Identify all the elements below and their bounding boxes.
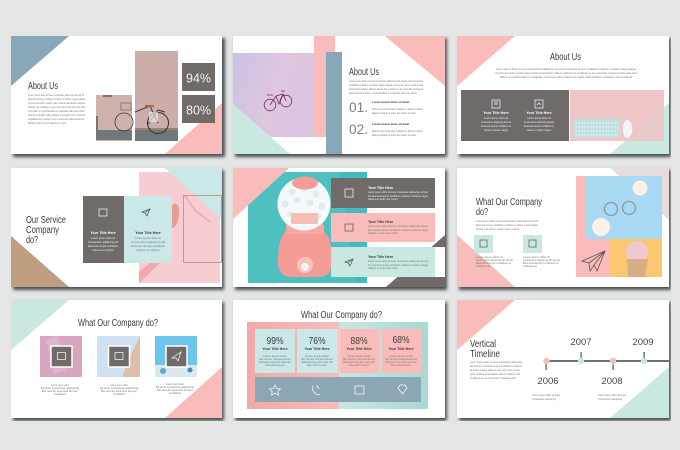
intro text: Duis aute irure dolor in reprehenderit in voluptate velit esse cillum <box>349 91 417 95</box>
stat card: 99%: Your Title Here <box>262 347 288 351</box>
mint row: Do eiusmod tempor incididunt ut labore et dolore magna <box>368 263 429 267</box>
list item 02: Sed do eiusmod tempor incididunt ut labore et dolore <box>372 129 423 133</box>
pink corner triangle <box>457 235 515 287</box>
heading: What Our Company do?: do? <box>476 207 488 218</box>
heading: What Our Company do? <box>476 197 542 218</box>
slide: What Our Company do? with three photos <box>11 300 224 421</box>
caption three: Lorem ipsum dolor <box>166 382 184 386</box>
feature one: Lorem ipsum dolor sit <box>476 255 503 259</box>
pink row <box>331 213 435 242</box>
mint service card: Your Title Here <box>135 231 161 235</box>
gold outline frame <box>184 196 222 262</box>
grey panel with two items: Lorem ipsum dolor sit <box>527 116 551 120</box>
stat card: 88%: Adipiscing elit sed do <box>343 360 376 364</box>
body text: Lorem ipsum dolor sit amet consectetur adipiscing <box>470 360 522 364</box>
list item 01: 01. <box>349 99 368 115</box>
stat card: 88%: Lorem ipsum dolor <box>347 354 371 358</box>
list item 01: Sed do eiusmod tempor incididunt ut labore et dolore <box>372 107 423 111</box>
stat card: 68%: Lorem ipsum dolor <box>389 354 413 358</box>
stat card: 76%: Eiusmod tempor <box>307 363 327 367</box>
grey service card: Eiusmod tempor incididunt <box>88 244 118 248</box>
intro text: Ut enim ad minim veniam quis nostrud <box>476 227 520 231</box>
intro text: Dolor in reprehenderit in voluptate velit esse cillum dolore eu fugiat nulla pariatur excepteur sint occaecat <box>500 75 632 79</box>
list item 01 <box>349 99 423 115</box>
stat card: 76%: Lorem ipsum dolor <box>305 354 329 358</box>
year and note: 2006 <box>532 376 560 401</box>
caption three <box>156 382 195 395</box>
year and note: 2008: Consectetur adipiscing <box>598 397 623 401</box>
stat box: 94%: 94% <box>186 72 211 86</box>
grey panel with two items: Eiusmod tempor incididunt ut <box>481 124 511 128</box>
stat card: 76%: Your Title Here <box>304 347 330 351</box>
photo: rings on blue <box>585 176 662 239</box>
heading: What Our Company do?: What Our Company <box>476 197 542 208</box>
heading: Our Service Company do?: Company <box>26 225 59 236</box>
stat card: 68%: 68% <box>392 335 410 346</box>
body text: Cupidatat non proident sunt in culpa qui officia deserunt <box>28 117 84 121</box>
heading: Vertical Timeline: Timeline <box>470 349 500 360</box>
slide: What Our Company do? with percentages <box>233 300 447 421</box>
body text: Ut enim ad minim veniam quis nostrud exercitation ullamco <box>28 101 85 105</box>
grey row: Lorem ipsum dolor sit amet consectetur adipiscing elit sed <box>368 190 428 194</box>
stat card: 88%: Your Title Here <box>346 347 372 351</box>
pink corner triangle <box>385 36 445 86</box>
grey row <box>331 178 435 208</box>
body text: Mollit anim id est laborum sed <box>28 121 67 125</box>
feature one: Eiusmod tempor incididunt ut <box>476 261 511 265</box>
body text: Lorem ipsum dolor sit amet consectetur adipiscing elit sed do <box>28 93 84 97</box>
caption three: Elit sed do eiusmod tempor <box>157 388 193 392</box>
pink corner triangle <box>457 300 515 350</box>
photo: keyboard and mouse on pink <box>570 90 664 141</box>
feature one: Labore et <box>476 264 490 268</box>
grey corner triangle <box>386 235 445 287</box>
photo card one <box>40 336 82 377</box>
stat box: 80%: 80% <box>186 104 211 118</box>
intro text <box>495 67 638 79</box>
stat card: 88%: Eiusmod tempor <box>349 363 369 367</box>
stat card: 68%: Sit amet consectetur <box>385 357 417 361</box>
intro text: Eiusmod tempor incididunt ut labore et dolore magna aliqua <box>476 223 538 227</box>
grey panel with two items: Eiusmod tempor incididunt ut <box>524 124 554 128</box>
stat card: 88%: 88% <box>350 336 368 347</box>
pink corner triangle <box>165 103 222 154</box>
year and note: 2006: Consectetur adipiscing <box>532 397 557 401</box>
intro text: Lorem ipsum dolor sit amet consectetur adipiscing elit sed do eiusmod tempor <box>349 79 423 83</box>
intro text: Ut enim ad minim veniam quis nostrud exercitation ullamco laboris nisi ut aliquip ex ea commodo consequat duis aute irure <box>495 71 638 75</box>
pink row: Lorem ipsum dolor sit amet consectetur adipiscing elit sed <box>368 224 428 228</box>
caption three: Incididunt <box>169 391 181 395</box>
stat card: 76% <box>297 329 338 373</box>
stat card: 68%: Eiusmod tempor <box>391 363 411 367</box>
grey service card: Lorem ipsum dolor sit <box>91 236 115 240</box>
year and note: 2006: Lorem ipsum dolor sit amet <box>532 393 560 397</box>
body text: Eiusmod tempor incididunt ut labore et dolore magna aliqua <box>28 97 85 101</box>
grey service card: Your Title Here <box>90 231 116 235</box>
caption one: Sit amet consectetur adipiscing <box>41 386 80 390</box>
caption two: Sit amet consectetur adipiscing <box>100 386 139 390</box>
caption two: Elit sed do eiusmod tempor <box>101 389 137 393</box>
blue corner triangle <box>11 36 69 86</box>
photo: pink hand background <box>139 172 220 283</box>
caption one: Incididunt <box>54 392 66 396</box>
heading: Vertical Timeline <box>470 339 500 360</box>
stat card: 68%: Adipiscing elit sed do <box>385 360 418 364</box>
stat card: 88% <box>340 329 379 373</box>
mint corner triangle <box>11 300 69 350</box>
heading: About Us: About Us <box>349 67 379 78</box>
photo card three <box>155 336 197 377</box>
mint service card: Lorem ipsum dolor sit <box>135 236 161 240</box>
feature one <box>474 235 514 268</box>
mint service card <box>124 196 172 263</box>
mint row <box>331 247 435 277</box>
photo: gumball machine <box>248 172 367 283</box>
blue vertical band <box>326 52 342 154</box>
white band behind mint row <box>367 247 445 277</box>
pale corner triangle <box>610 168 669 220</box>
mint background block <box>339 322 428 409</box>
photo: bicycle rear on tall panel <box>135 51 178 141</box>
heading: About Us: About Us <box>28 81 58 92</box>
stat card: 99%: Adipiscing elit sed do <box>259 360 292 364</box>
list item 02: Magna aliqua ut enim ad minim veniam <box>372 133 416 137</box>
stat card: 68% <box>382 329 422 373</box>
year: 2007: 2007 <box>570 337 592 348</box>
feature two: Consectetur adipiscing elit sed do <box>523 258 561 262</box>
stat box: 94% <box>182 63 215 91</box>
grey panel with two items: Consectetur adipiscing elit sed <box>481 120 511 124</box>
grey panel with two items: Lorem ipsum dolor sit <box>484 116 508 120</box>
feature two: Labore et <box>523 264 537 268</box>
body text: Dolore eu fugiat nulla pariatur excepteur sint occaecat <box>28 113 85 117</box>
mint triangle <box>233 104 290 154</box>
feature one: Consectetur adipiscing elit sed do <box>476 258 514 262</box>
mint corner triangle <box>610 367 669 418</box>
photo: bicycle on lavender <box>233 53 314 137</box>
mint corner triangle <box>610 103 669 154</box>
stat card: 76%: Sit amet consectetur <box>301 357 333 361</box>
caption one: Lorem ipsum dolor <box>51 383 69 387</box>
slide: Our Service Company do? <box>11 168 224 290</box>
list item 02 <box>349 121 423 137</box>
slide: gumball machine with three rows <box>233 168 447 290</box>
heading: Vertical Timeline: Vertical <box>470 339 496 350</box>
slide: Vertical Timeline <box>457 300 671 421</box>
mint corner shape <box>165 168 222 220</box>
body text: Quis nostrud exercitation ullamco laboris nisi <box>470 372 520 376</box>
caption one <box>41 383 80 396</box>
photo: ice cream on yellow <box>610 239 662 277</box>
stat card: 68%: Your Title Here <box>388 347 414 351</box>
grey service card <box>83 196 124 263</box>
grey panel with two items: Consectetur adipiscing elit sed <box>524 120 554 124</box>
mint row: Aliqua ut enim ad minim <box>368 266 398 270</box>
stat card: 99%: Lorem ipsum dolor <box>263 354 287 358</box>
grey panel with two items: Your Title Here <box>526 111 552 115</box>
mint row: Lorem ipsum dolor sit amet consectetur adipiscing elit sed <box>368 259 428 263</box>
icon: paper plane <box>582 251 605 271</box>
photo: bicycle front <box>96 95 133 141</box>
feature two <box>523 235 561 268</box>
year and note: 2008: 2008 <box>601 376 623 387</box>
intro text: Incididunt ut labore et dolore magna aliqua ut enim ad minim veniam quis <box>349 83 424 87</box>
stat card: 99%: Sit amet consectetur <box>259 357 291 361</box>
slide: About Us with bicycle photos and percentages <box>11 36 225 157</box>
stat card: 99% <box>255 329 295 373</box>
slide: What Our Company do? with photo collage <box>457 168 671 290</box>
body text: Irure dolor in reprehenderit in voluptate velit esse cillum <box>28 109 85 113</box>
stat card: 88%: Sit amet consectetur <box>343 357 375 361</box>
pink vertical band <box>314 36 335 137</box>
body text: Et dolore magna aliqua ut enim ad minim veniam <box>470 368 520 372</box>
body text: Elit sed do eiusmod tempor incididunt ut labore <box>470 364 523 368</box>
caption two <box>100 383 139 396</box>
intro text: Lorem ipsum dolor sit amet consectetur adipiscing elit sed do eiusmod tempor incididunt ut labore et dolore magna aliqua <box>496 67 637 71</box>
photo card two <box>97 336 140 377</box>
pink row: Aliqua ut enim ad minim <box>368 231 398 235</box>
heading: What Our Company do?: What Our Company do? <box>301 310 382 321</box>
grey service card: Consectetur adipiscing elit <box>88 240 118 244</box>
body text <box>470 360 523 380</box>
mint service card: Eiusmod tempor incididunt <box>131 244 165 248</box>
stat box: 80% <box>182 95 215 123</box>
caption two: Incididunt <box>113 392 125 396</box>
slide: About Us with purple bike photo and numbered list <box>233 36 447 157</box>
caption one: Elit sed do eiusmod tempor <box>42 389 78 393</box>
year and note: 2008 <box>598 376 626 401</box>
pink corner triangle <box>457 36 515 86</box>
grey service card: Labore et dolore <box>92 248 115 252</box>
list item 01: Magna aliqua ut enim ad minim veniam <box>372 111 416 115</box>
grey panel with two items: Your Title Here <box>483 111 509 115</box>
grey row: Your Title Here <box>368 186 393 190</box>
tan corner triangle <box>11 236 69 287</box>
year and note: 2006: 2006 <box>537 376 559 387</box>
feature two: Eiusmod tempor incididunt ut <box>523 261 558 265</box>
list item 02: Lorem ipsum dolor sit amet. <box>372 122 410 126</box>
timeline axis and markers <box>543 352 669 370</box>
slide: About Us with grey panel and keyboard photo <box>457 36 671 157</box>
grey row: Do eiusmod tempor incididunt ut labore et dolore magna <box>368 194 429 198</box>
grey row: Aliqua ut enim ad minim <box>368 197 398 201</box>
list item 02: 02. <box>349 121 368 137</box>
pink row: Do eiusmod tempor incididunt ut labore et dolore magna <box>368 228 429 232</box>
stat card: 99%: Eiusmod tempor <box>265 363 285 367</box>
list item 01: Lorem ipsum dolor sit amet. <box>372 100 410 104</box>
grey panel with two items: Labore et dolore magna <box>527 128 551 132</box>
stat card: 76%: 76% <box>308 336 326 347</box>
pink corner triangle <box>233 168 289 219</box>
stat card: 76%: Adipiscing elit sed do <box>301 360 334 364</box>
mint service card: Consectetur adipiscing elit <box>131 240 165 244</box>
year and note: 2008: Lorem ipsum dolor sit amet <box>598 393 626 397</box>
pink corner triangle <box>165 367 222 418</box>
caption three: Sit amet consectetur adipiscing <box>156 385 195 389</box>
intro text <box>476 219 538 231</box>
heading: Our Service Company do? <box>26 215 66 246</box>
pink collage panel <box>576 176 610 277</box>
intro text <box>349 79 424 95</box>
mint service card: Labore et dolore <box>136 248 161 252</box>
grey panel with two items <box>461 90 569 141</box>
mint row: Your Title Here <box>368 255 393 259</box>
pink row: Your Title Here <box>368 220 393 224</box>
pink background block <box>247 322 339 409</box>
heading: What Our Company do?: What Our Company do? <box>78 318 158 329</box>
heading: Our Service Company do?: do? <box>26 235 38 246</box>
feature two: Lorem ipsum dolor sit <box>523 255 550 259</box>
caption two: Lorem ipsum dolor <box>110 383 128 387</box>
body text: Laboris nisi ut aliquip ex ea commodo consequat duis aute <box>28 105 85 109</box>
intro text: Lorem ipsum dolor sit amet consectetur adipiscing elit sed do <box>476 219 538 223</box>
heading: About Us: About Us <box>550 52 581 63</box>
body text: Ut aliquip ex ea commodo consequat duis <box>470 376 517 380</box>
blue icon bar <box>255 377 421 402</box>
year: 2009: 2009 <box>632 337 654 348</box>
grey panel with two items: Labore et dolore magna <box>484 128 508 132</box>
intro text: Nostrud exercitation ullamco laboris nisi ut aliquip ex ea commodo consequat <box>349 87 423 91</box>
stat card: 99%: 99% <box>266 336 284 347</box>
body text <box>28 93 85 125</box>
heading: Our Service Company do?: Our Service <box>26 215 66 226</box>
